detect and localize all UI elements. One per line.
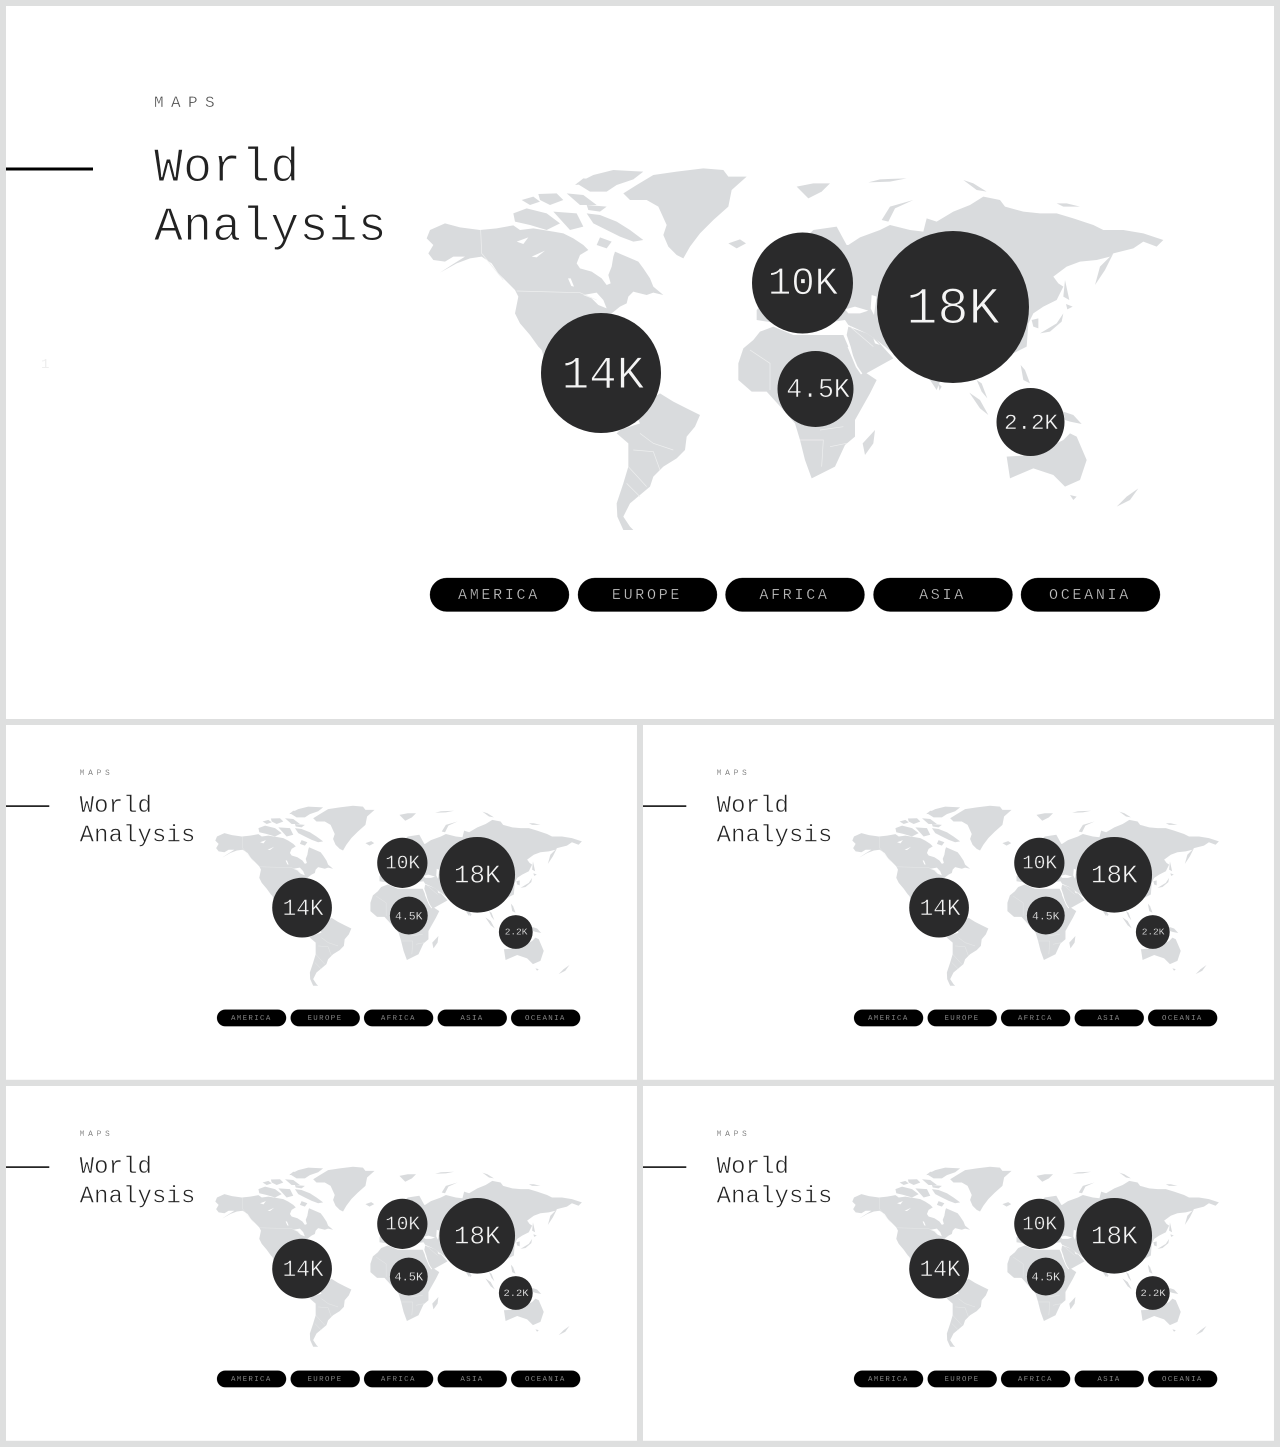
pill: Europe (928, 1371, 997, 1387)
bubble: Asia 18K: 18K (454, 861, 501, 891)
pill: Oceania: OCEANIA (525, 1015, 566, 1023)
bubble: Africa 4.5K (1027, 897, 1065, 934)
pill: America: AMERICA (231, 1015, 272, 1023)
pill: Europe (291, 1010, 360, 1026)
bubble: America 14K: 14K (562, 350, 645, 402)
pill: Asia: ASIA (1097, 1015, 1121, 1023)
bubble: Asia 18K: 18K (906, 280, 1001, 339)
pill: Oceania (511, 1371, 580, 1387)
bubble: Oceania 2.2K: 2.2K (1004, 410, 1058, 436)
bubble: Oceania 2.2K (996, 388, 1064, 456)
pill: Asia: ASIA (460, 1376, 484, 1384)
panel: main slide (6, 6, 1274, 719)
bubble: America 14K: 14K (919, 896, 961, 922)
bubble: America 14K (909, 878, 969, 937)
bubble: Asia 18K: 18K (1091, 861, 1138, 891)
pill: Oceania: OCEANIA (1162, 1376, 1203, 1384)
pill: Europe (578, 578, 717, 612)
faint page number: 1 (41, 357, 49, 373)
pill: America (854, 1010, 923, 1026)
bubble: Asia 18K (1076, 1198, 1152, 1274)
pill: America (430, 578, 569, 612)
pill: Africa: AFRICA (1018, 1015, 1053, 1023)
pill: Oceania (1148, 1371, 1217, 1387)
pill: Oceania: OCEANIA (525, 1376, 566, 1384)
title: World (154, 142, 300, 196)
pill: Asia: ASIA (1097, 1376, 1121, 1384)
bubble: Africa 4.5K (778, 351, 854, 427)
pill: Africa (364, 1371, 433, 1387)
world map (427, 168, 1163, 530)
pill: Europe: EUROPE (612, 587, 682, 604)
title: World (80, 1154, 152, 1181)
bubble: Africa 4.5K: 4.5K (786, 375, 850, 405)
bubble: Asia 18K (1076, 837, 1152, 913)
title: World (717, 793, 789, 820)
pill: Oceania (511, 1010, 580, 1026)
title: Analysis (717, 1183, 832, 1210)
eyebrow: MAPS: MAPS (717, 1130, 750, 1139)
pill: America (854, 1371, 923, 1387)
pill: Africa: AFRICA (1018, 1376, 1053, 1384)
pill: Europe (928, 1010, 997, 1026)
title: World (717, 1154, 789, 1181)
bubble: Oceania 2.2K (499, 1276, 533, 1310)
bubble: Europe 10K (377, 1199, 427, 1249)
world map (215, 1167, 582, 1347)
bubble: Europe 10K: 10K (385, 852, 420, 874)
bubble: America 14K: 14K (282, 896, 324, 922)
eyebrow: MAPS: MAPS (80, 1130, 113, 1139)
pill: Asia (874, 578, 1012, 612)
bubble: Europe 10K: 10K (385, 1213, 420, 1235)
pill: Africa (364, 1010, 433, 1026)
accent line (643, 1166, 686, 1168)
bubble: Oceania 2.2K (499, 915, 533, 949)
bubble: Africa 4.5K: 4.5K (1032, 911, 1060, 924)
legend pills (430, 578, 1160, 612)
pill: America: AMERICA (458, 587, 540, 604)
bubble: Europe 10K: 10K (768, 262, 839, 306)
pill: Africa (1001, 1371, 1070, 1387)
bubble: Oceania 2.2K: 2.2K (505, 926, 528, 937)
legend pills (854, 1010, 1217, 1026)
panel: small slide bottom left (6, 1086, 637, 1441)
title: Analysis (80, 822, 195, 849)
bubble: America 14K (272, 1239, 332, 1298)
pill: Europe: EUROPE (308, 1376, 342, 1384)
accent line (6, 168, 93, 170)
bubble: Asia 18K: 18K (454, 1222, 501, 1252)
panel: small slide top left (6, 725, 637, 1080)
pill: Europe (291, 1371, 360, 1387)
bubble: Asia 18K (439, 837, 515, 913)
bubble: America 14K (909, 1239, 969, 1298)
bubble: Europe 10K (1014, 838, 1064, 888)
accent line (6, 805, 49, 807)
title: Analysis (80, 1183, 195, 1210)
legend pills (217, 1010, 580, 1026)
legend pills (854, 1371, 1217, 1387)
bubble: Africa 4.5K (390, 897, 428, 934)
pill: America: AMERICA (868, 1015, 909, 1023)
pill: Asia (438, 1371, 507, 1387)
title: Analysis (154, 201, 387, 255)
bubble: Europe 10K (752, 232, 853, 334)
eyebrow: MAPS: MAPS (154, 94, 222, 112)
eyebrow: MAPS: MAPS (717, 769, 750, 778)
pill: Africa: AFRICA (381, 1015, 416, 1023)
bubble: Asia 18K (439, 1198, 515, 1274)
bubble: America 14K (541, 313, 661, 433)
pill: Asia (1075, 1371, 1144, 1387)
panel: small slide bottom right (643, 1086, 1274, 1441)
pill: Oceania: OCEANIA (1049, 587, 1131, 604)
legend pills (217, 1371, 580, 1387)
pill: Europe: EUROPE (945, 1376, 979, 1384)
pill: America: AMERICA (868, 1376, 909, 1384)
pill: Africa: AFRICA (759, 587, 830, 604)
bubble: Europe 10K (1014, 1199, 1064, 1249)
bubble: Africa 4.5K (390, 1258, 428, 1295)
world map (852, 1167, 1219, 1347)
pill: Asia (438, 1010, 507, 1026)
bubble: Africa 4.5K: 4.5K (394, 1271, 424, 1285)
bubble: Asia 18K (877, 231, 1029, 383)
eyebrow: MAPS: MAPS (80, 769, 113, 778)
bubble: America 14K: 14K (919, 1257, 961, 1283)
world map (852, 806, 1219, 986)
bubble: Africa 4.5K (1027, 1258, 1065, 1295)
pill: Oceania: OCEANIA (1162, 1015, 1203, 1023)
panel: small slide top right (643, 725, 1274, 1080)
bubble: America 14K (272, 878, 332, 937)
title: World (80, 793, 152, 820)
pill: America: AMERICA (231, 1376, 272, 1384)
world map (215, 806, 582, 986)
bubble: Oceania 2.2K: 2.2K (1141, 1288, 1166, 1300)
bubble: Oceania 2.2K (1136, 1276, 1170, 1310)
bubble: Oceania 2.2K: 2.2K (504, 1288, 529, 1300)
pill: Asia (1075, 1010, 1144, 1026)
pill: Africa: AFRICA (381, 1376, 416, 1384)
pill: Oceania (1148, 1010, 1217, 1026)
bubble: Asia 18K: 18K (1091, 1222, 1138, 1252)
pill: Asia: ASIA (460, 1015, 484, 1023)
bubble: Europe 10K: 10K (1022, 852, 1057, 874)
bubble: Africa 4.5K: 4.5K (1031, 1271, 1061, 1285)
pill: Africa (1001, 1010, 1070, 1026)
pill: Asia: ASIA (919, 587, 966, 604)
accent line (643, 805, 686, 807)
bubble: Oceania 2.2K (1136, 915, 1170, 949)
pill: Africa (726, 578, 864, 612)
accent line (6, 1166, 49, 1168)
bubble: Europe 10K: 10K (1022, 1213, 1057, 1235)
title: Analysis (717, 822, 832, 849)
bubble: Africa 4.5K: 4.5K (395, 911, 423, 924)
bubble: Europe 10K (377, 838, 427, 888)
bubble: Oceania 2.2K: 2.2K (1142, 926, 1165, 937)
pill: Europe: EUROPE (308, 1015, 342, 1023)
pill: Europe: EUROPE (945, 1015, 979, 1023)
bubble: America 14K: 14K (282, 1257, 324, 1283)
pill: Oceania (1021, 578, 1160, 612)
pill: America (217, 1371, 286, 1387)
pill: America (217, 1010, 286, 1026)
